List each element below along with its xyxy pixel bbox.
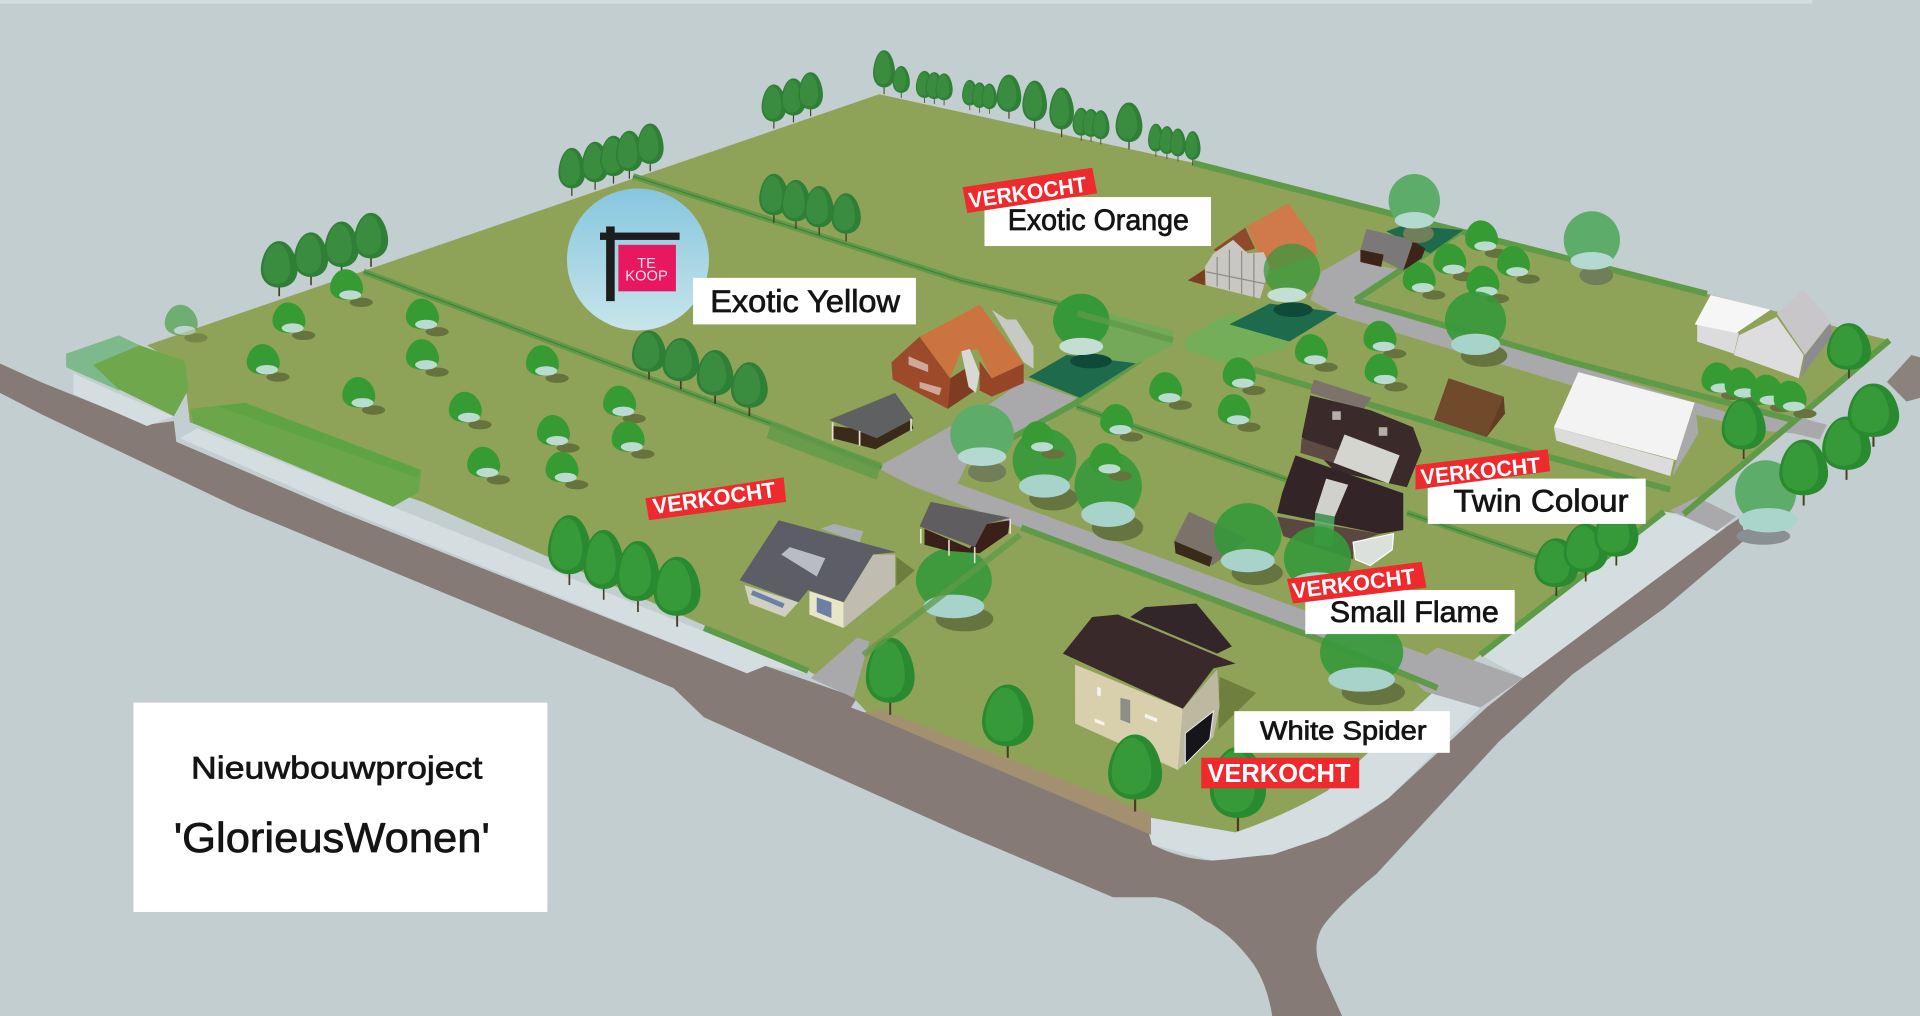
shed: brown — [1434, 378, 1505, 437]
barn: Exotic Yellow — [829, 393, 913, 449]
label: Exotic Orange: Exotic Orange — [1008, 204, 1189, 237]
barn: Exotic Orange — [1360, 229, 1425, 271]
house: White Spider — [1063, 603, 1256, 770]
label: White Spider — [1234, 711, 1450, 753]
house: grey roof — [740, 520, 915, 628]
shed: large white — [1554, 372, 1698, 476]
tree behind grey-house barn — [916, 548, 993, 631]
sign board: KOOP — [625, 268, 668, 284]
label: White Spider: White Spider — [1260, 717, 1427, 745]
sign board — [618, 245, 676, 291]
tag: verkocht Exotic Orange: VERKOCHT — [967, 172, 1089, 213]
label: Small Flame — [1305, 590, 1515, 634]
house: Twin Colour — [1277, 379, 1422, 566]
sign board: TE — [637, 256, 656, 272]
sign crossbar — [600, 233, 680, 240]
tag: verkocht Small Flame: VERKOCHT — [1291, 564, 1417, 604]
back row trees — [261, 50, 1201, 627]
hedges — [364, 163, 1889, 688]
garden patches — [1029, 225, 1463, 398]
title line 1: Nieuwbouwproject — [191, 750, 483, 786]
label: Twin Colour — [1428, 479, 1646, 524]
tag: verkocht left plot: VERKOCHT — [651, 477, 778, 519]
label: Exotic Yellow: Exotic Yellow — [710, 283, 901, 319]
label: Exotic Yellow — [693, 278, 916, 324]
tag: verkocht White Spider: VERKOCHT — [1207, 760, 1351, 788]
overlay hedges — [863, 313, 1173, 655]
building plots field — [147, 94, 1889, 832]
foreground large trees — [866, 503, 1638, 831]
label: Twin Colour: Twin Colour — [1453, 483, 1629, 519]
sidewalks — [73, 373, 1725, 861]
house: Exotic Yellow — [891, 305, 1033, 409]
right corner tree cluster — [1722, 323, 1899, 545]
sign post — [606, 226, 615, 301]
tag: verkocht Twin Colour: VERKOCHT — [1420, 452, 1542, 490]
large trees behind houses — [950, 174, 1620, 541]
brick boundary strip — [863, 710, 1151, 835]
barn: Twin Colour — [1174, 512, 1248, 567]
te koop badge — [567, 189, 709, 331]
road network — [0, 355, 1920, 1016]
label: Exotic Orange — [984, 197, 1211, 246]
house: Exotic Orange — [1188, 203, 1318, 299]
title card — [133, 703, 547, 912]
label: Small Flame: Small Flame — [1330, 596, 1499, 629]
title line 2: 'GlorieusWonen' — [174, 814, 490, 861]
entrance hedge blocks — [66, 335, 421, 507]
internal gravel roads — [811, 246, 1827, 708]
top edge highlight — [0, 0, 1812, 4]
orchard trees — [165, 220, 1817, 489]
barn: grey house — [920, 502, 1010, 563]
house: far right farmhouse — [1695, 289, 1832, 378]
